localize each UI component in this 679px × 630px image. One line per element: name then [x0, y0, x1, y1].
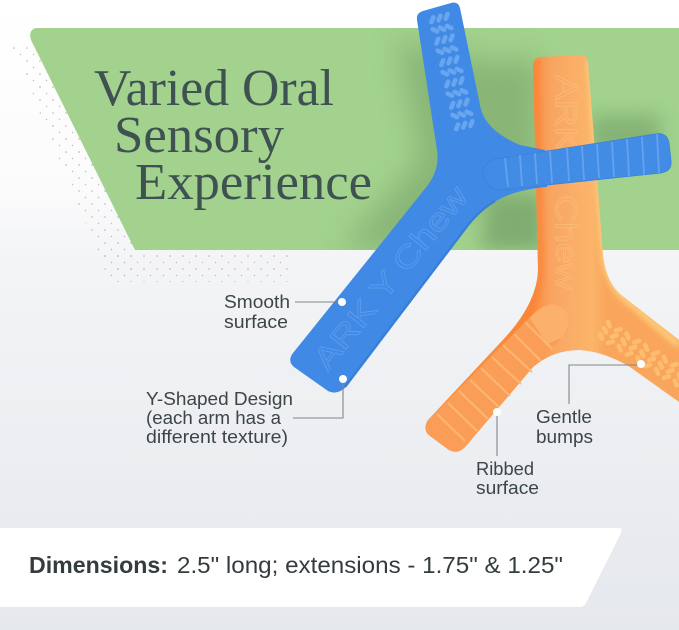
title: Varied Oral: [94, 60, 334, 117]
callout: Y-shaped design: different texture): [146, 427, 288, 447]
embossed lettering: ARK Y Chew: [549, 75, 584, 291]
callout: gentle bumps: bumps: [536, 427, 593, 447]
callout: ribbed surface: Ribbed: [476, 459, 534, 479]
icon: orange Y-shaped chew: [425, 55, 679, 452]
dimensions text: [29, 552, 563, 578]
icon: blue Y-shaped chew: [290, 3, 671, 393]
callout: Y-shaped design: Y-Shaped Design: [146, 389, 293, 409]
highlight on upper edge: [505, 60, 679, 345]
dimensions text: 2.5" long; extensions - 1.75" & 1.25": [177, 552, 563, 578]
darker lower edge: [345, 201, 495, 387]
embossed lettering: ARK Y Chew: [306, 179, 476, 376]
callout: Y-shaped design: (each arm has a: [146, 408, 282, 428]
product shadows on banner: [340, 40, 660, 250]
callout: smooth surface: [224, 292, 346, 332]
title: Experience: [135, 154, 372, 211]
panel: green heading banner: [30, 28, 679, 250]
rounded arm cap: [530, 305, 569, 344]
bumps: [594, 317, 679, 395]
ribs: [437, 322, 552, 441]
callout: ribbed surface: [476, 408, 539, 498]
title: Sensory: [114, 107, 284, 164]
chevron bumps: [427, 10, 478, 133]
ribbed arm: [483, 134, 671, 190]
ribs: [505, 134, 659, 187]
panel: dimensions bar: [0, 528, 622, 607]
callout: Y-shaped design: [146, 375, 347, 447]
callout: gentle bumps: Gentle: [536, 407, 592, 427]
callout: ribbed surface: surface: [476, 478, 539, 498]
dimensions text: Dimensions:: [29, 552, 168, 578]
ribbed arm: [425, 304, 569, 452]
callout: smooth surface: surface: [224, 312, 288, 332]
callout: gentle bumps: [536, 360, 645, 447]
title: [94, 60, 372, 211]
callout: smooth surface: Smooth: [224, 292, 290, 312]
dotted halftone panel: [12, 46, 135, 282]
